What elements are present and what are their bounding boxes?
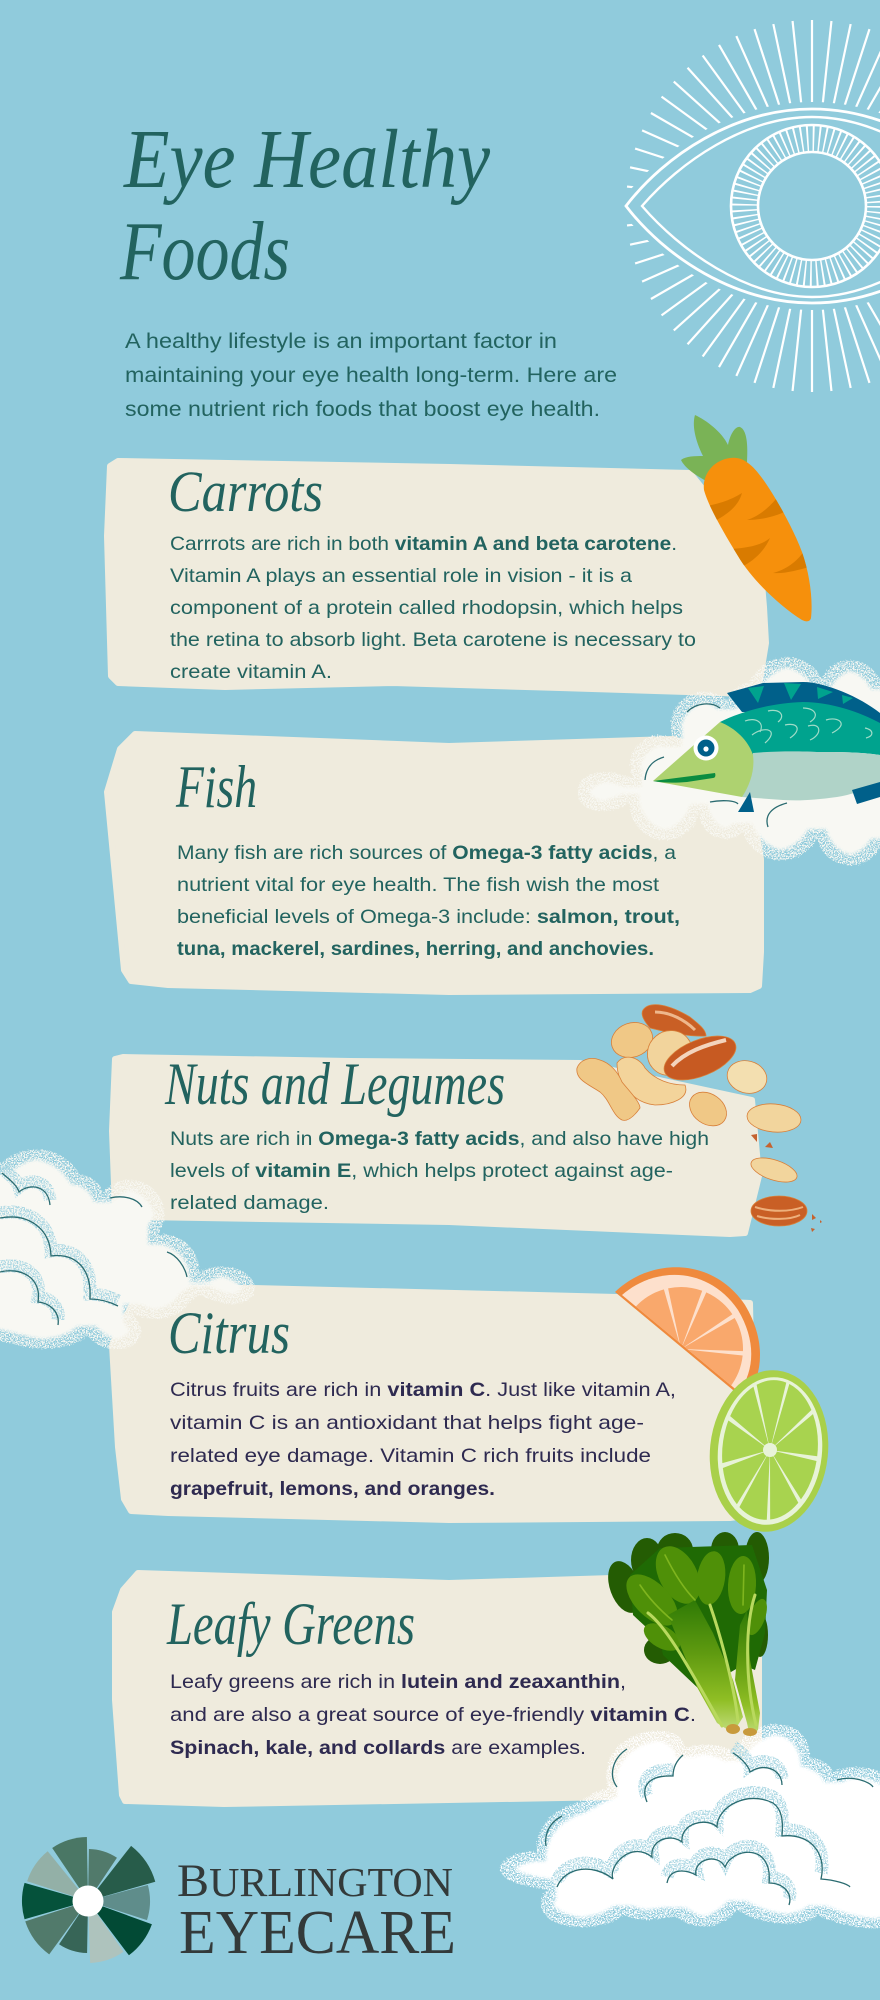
heading: carrots: Carrots [168,459,323,524]
intro text: some nutrient rich foods that boost eye health. [125,397,600,421]
text: leafy greens: Spinach, kale, and collards are examples. [170,1737,586,1759]
icon: cloud bottom right [500,1724,880,1928]
text: fish: nutrient vital for eye health. The fish wish the most [177,874,660,896]
icon: leafy greens [602,1532,771,1737]
text: leafy greens [170,1671,696,1759]
heading: leafy greens: Leafy Greens [166,1591,415,1657]
panel: nuts and legumes [112,1051,759,1234]
text: nuts and legumes: levels of vitamin E , which helps protect against age- [170,1160,673,1182]
intro text [125,329,617,421]
icon: fish [653,682,880,812]
title: Foods [119,205,290,298]
heading: nuts and legumes: Nuts and Legumes [164,1051,505,1117]
panel: carrots [107,459,766,694]
logo: wordmark: EYECARE [179,1899,456,1967]
logo: wordmark: BURLINGTON [177,1855,453,1907]
text: leafy greens: Leafy greens are rich in lutein and zeaxanthin , [170,1671,626,1693]
icon: lime [702,1364,836,1538]
text: citrus: grapefruit, lemons, and oranges. [170,1478,495,1500]
icon: eye with sun rays [626,20,880,392]
icon: cloud behind fish [578,657,880,865]
heading: citrus: Citrus [168,1300,290,1366]
logo: burlington eyecare mark [39,1852,137,1950]
title: Eye Healthy [123,113,491,206]
text: citrus: Citrus fruits are rich in vitamin C . Just like vitamin A, [170,1379,676,1401]
panel: citrus [112,1288,752,1520]
panel: leafy greens [115,1573,759,1804]
text: carrots [170,533,696,683]
text: fish: tuna, mackerel, sardines, herring, and anchovies. [177,938,654,960]
text: nuts and legumes: Nuts are rich in Omega-3 fatty acids , and also have high [170,1128,709,1150]
text: fish: Many fish are rich sources of Omega-3 fatty acids , a [177,842,676,864]
text: carrots: create vitamin A. [170,661,332,683]
intro text: A healthy lifestyle is an important factor in [125,329,557,353]
text: carrots: component of a protein called rhodopsin, which helps [170,597,683,619]
text: carrots: the retina to absorb light. Beta carotene is necessary to [170,629,696,651]
text: leafy greens: and are also a great source of eye-friendly vitamin C . [170,1704,696,1726]
text: nuts and legumes: related damage. [170,1192,329,1214]
logo: wordmark [177,1855,456,1967]
heading: fish: Fish [175,754,257,820]
icon: grapefruit [615,1267,760,1400]
text: fish: beneficial levels of Omega-3 include: salmon, trout, [177,906,680,928]
icon: carrot [681,415,812,621]
text: carrots: Vitamin A plays an essential role in vision - it is a [170,565,632,587]
text: nuts and legumes [170,1128,709,1214]
text: carrots: Carrrots are rich in both vitamin A and beta carotene . [170,533,677,555]
icon: cloud left [0,1149,255,1349]
panel: fish [107,734,761,992]
icon: nuts [577,1005,822,1232]
text: citrus [170,1379,676,1500]
title [119,113,491,298]
intro text: maintaining your eye health long-term. Here are [125,363,617,387]
text: fish [177,842,680,960]
text: citrus: related eye damage. Vitamin C rich fruits include [170,1445,651,1467]
text: citrus: vitamin C is an antioxidant that helps fight age- [170,1412,644,1434]
